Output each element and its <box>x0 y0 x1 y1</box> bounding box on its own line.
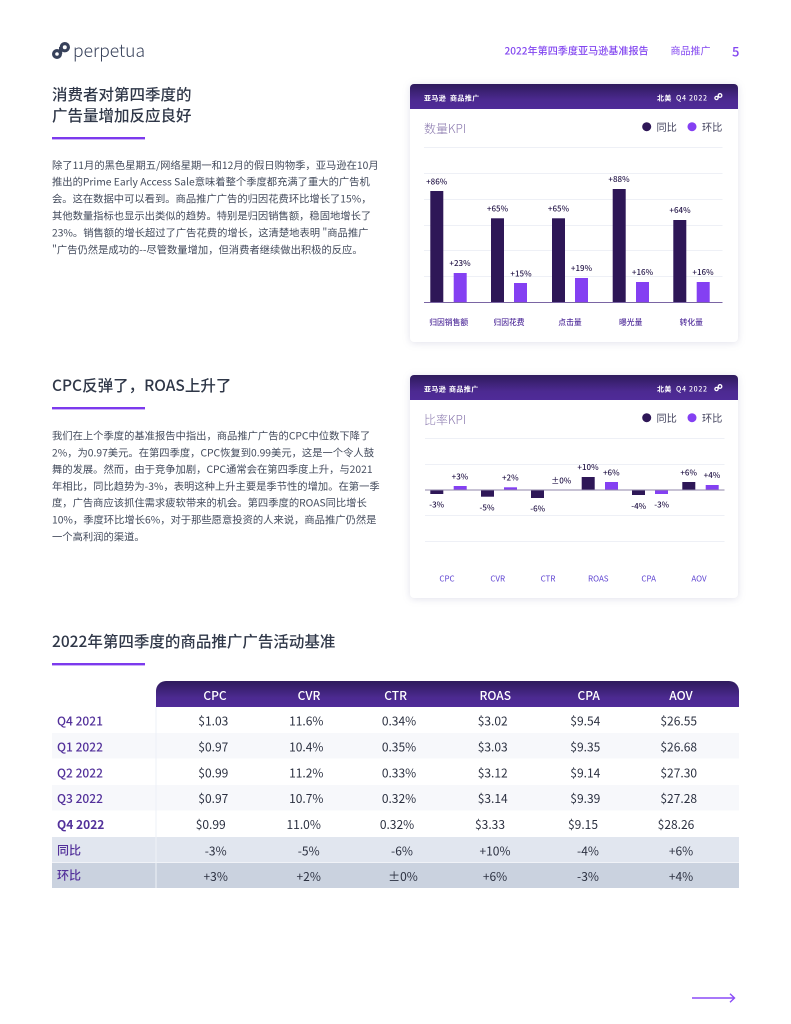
table header row: AOV <box>669 687 694 704</box>
bar chart: volume KPIs: 点击量 <box>558 317 582 328</box>
legend: 同比 <box>656 119 677 134</box>
panel header bar: 商品推广 <box>449 384 479 394</box>
row: Q2 2022: 11.2% <box>289 764 323 781</box>
section 1 body text <box>52 157 379 256</box>
table header row: CTR <box>384 687 407 704</box>
section 3 heading: 2022年第四季度的商品推广广告活动基准 <box>52 630 335 652</box>
section 2 heading: CPC反弹了，ROAS上升了 <box>52 374 231 396</box>
bar chart: ratio KPIs: ±0% <box>551 476 572 486</box>
section 2 body text: 年相比，同比趋势为-3%，表明这种上升主要是季节性的增加。在第一季 <box>52 478 380 493</box>
table header row <box>156 681 739 707</box>
panel header bar: Q4 2022 <box>676 384 708 394</box>
panel header bar: 北美 <box>657 384 672 394</box>
chart title: 数量KPI <box>424 120 466 137</box>
row: year over year: +10% <box>479 842 511 860</box>
legend: 同比 <box>656 410 677 425</box>
section 1 body text: "广告仍然是成功的--尽管数量增加，但消费者继续做出积极的反应。 <box>52 241 363 256</box>
table header row: ROAS <box>480 687 511 704</box>
row: Q4 2022: $0.99 <box>196 816 226 833</box>
bar chart: ratio KPIs: +6% <box>680 468 697 478</box>
row: Q2 2022: $3.12 <box>478 764 508 781</box>
bar chart: ratio KPIs: ROAS <box>588 574 609 584</box>
row: quarter over quarter <box>52 863 739 888</box>
legend: 环比 <box>702 410 722 425</box>
row: quarter over quarter: ±0% <box>388 868 418 885</box>
row: Q4 2022 <box>52 811 739 836</box>
row: year over year: -3% <box>205 842 227 860</box>
bar chart: volume KPIs: +19% <box>571 263 593 274</box>
section 2 body text: 度，广告商应该抓住需求疲软带来的机会。第四季度的ROAS同比增长 <box>52 495 367 510</box>
section 1 heading <box>52 83 192 139</box>
bar chart: volume KPIs: +65% <box>487 204 509 214</box>
bar chart: volume KPIs: +15% <box>510 268 532 280</box>
row: quarter over quarter: 环比 <box>57 866 81 884</box>
row: Q1 2022: $26.68 <box>660 738 697 756</box>
table header row: CVR <box>298 687 320 704</box>
bar chart: ratio KPIs: -5% <box>480 502 495 514</box>
legend <box>642 410 722 425</box>
row: Q2 2022: $0.99 <box>198 764 228 781</box>
row: year over year: 同比 <box>57 842 81 858</box>
panel header bar: 亚马逊 <box>424 384 446 394</box>
row: Q3 2022 <box>52 785 739 810</box>
row: Q4 2021: $3.02 <box>478 712 508 730</box>
row: Q3 2022: $27.28 <box>660 790 697 807</box>
section 2 body text: 2%，为0.97美元。在第四季度，CPC恢复到0.99美元，这是一个令人鼓 <box>52 444 374 459</box>
bar chart: volume KPIs: +64% <box>669 205 691 216</box>
report header: title, section, page number: 2022年第四季度亚马逊基准报告 <box>504 42 649 58</box>
bar chart: ratio KPIs: CVR <box>490 574 505 584</box>
report header: title, section, page number: 商品推广 <box>670 42 710 58</box>
bar chart: ratio KPIs: CPA <box>641 574 656 584</box>
bar chart: ratio KPIs: -3% <box>654 500 670 510</box>
row: year over year: -5% <box>298 842 320 860</box>
row: Q4 2022: Q4 2022 <box>57 816 104 833</box>
row: Q1 2022: $3.03 <box>478 738 508 756</box>
section 1 body text: 23%。销售额的增长超过了广告花费的增长，这清楚地表明 "商品推广 <box>52 224 368 239</box>
section 2 body text: 10%，季度环比增长6%，对于那些愿意投资的人来说，商品推广仍然是 <box>52 512 376 526</box>
bar chart: ratio KPIs: +3% <box>452 472 469 482</box>
row: Q1 2022: 0.35% <box>382 738 416 756</box>
icon: next page arrow <box>692 994 734 1002</box>
bar chart: ratio KPIs: +2% <box>502 472 519 484</box>
table header row: CPA <box>578 687 600 704</box>
section 1 body text: 会。这在数据中可以看到。商品推广广告的归因花费环比增长了15%， <box>52 191 372 206</box>
report header: title, section, page number: 5 <box>732 42 739 60</box>
row: Q4 2022: $9.15 <box>568 816 598 833</box>
row: quarter over quarter: +3% <box>204 868 228 885</box>
chart title: 比率KPI <box>424 411 466 428</box>
row: Q1 2022: $9.35 <box>570 738 601 756</box>
panel header bar: 商品推广 <box>450 94 480 104</box>
section 1 body text: 其他数量指标也显示出类似的趋势。特别是归因销售额，稳固地增长了 <box>52 208 371 222</box>
row: Q4 2021: 11.6% <box>289 712 323 730</box>
panel: volume KPI chart <box>410 84 738 342</box>
legend <box>642 119 722 134</box>
row: Q2 2022: $27.30 <box>660 764 697 781</box>
row: quarter over quarter: -3% <box>577 868 599 885</box>
logo: perpetua: perpetua <box>73 37 145 63</box>
bar chart: volume KPIs: +23% <box>449 258 471 269</box>
row: Q1 2022 <box>52 733 739 758</box>
row: Q1 2022: 10.4% <box>289 738 323 756</box>
row: Q4 2021: 0.34% <box>382 712 416 730</box>
row: Q3 2022: Q3 2022 <box>57 790 103 807</box>
bar chart: ratio KPIs: -6% <box>530 504 546 514</box>
section 1 body text: 推出的Prime Early Access Sale意味着整个季度都充满了重大的广告机 <box>52 174 370 189</box>
bar chart: ratio KPIs: -4% <box>631 501 647 512</box>
bar chart: ratio KPIs: AOV <box>691 574 707 584</box>
row: Q3 2022: $0.97 <box>198 790 229 807</box>
section 2 body text: 我们在上个季度的基准报告中指出，商品推广广告的CPC中位数下降了 <box>52 428 370 442</box>
row: Q3 2022: $9.39 <box>570 790 600 807</box>
bar chart: ratio KPIs: CTR <box>541 574 555 584</box>
bar chart: ratio KPIs: CPC <box>439 574 455 584</box>
row: Q3 2022: $3.14 <box>478 790 508 807</box>
row: Q4 2021: $1.03 <box>198 712 228 730</box>
row: year over year: +6% <box>669 842 693 860</box>
bar chart: ratio KPIs <box>425 438 724 584</box>
section 2 body text: 舞的发展。然而，由于竞争加剧，CPC通常会在第四季度上升，与2021 <box>52 461 373 476</box>
row: Q4 2022: $28.26 <box>658 816 695 833</box>
row: Q4 2022: 0.32% <box>380 816 414 833</box>
section 2 body text: 一个高利润的渠道。 <box>52 528 145 543</box>
panel header bar <box>410 84 738 109</box>
row: Q4 2022: 11.0% <box>287 816 321 833</box>
row: Q2 2022: 0.33% <box>382 764 416 781</box>
row: Q3 2022: 10.7% <box>289 790 323 807</box>
report header: title, section, page number <box>504 42 739 60</box>
row: Q2 2022: Q2 2022 <box>57 764 103 781</box>
bar chart: ratio KPIs: +4% <box>704 470 721 481</box>
panel header bar: 北美 <box>657 94 672 104</box>
row: Q1 2022: $0.97 <box>198 738 229 756</box>
table header row: CPC <box>203 687 227 704</box>
row: quarter over quarter: +4% <box>669 868 693 885</box>
panel header bar <box>410 375 738 400</box>
panel header bar: 亚马逊 <box>424 94 446 104</box>
row: quarter over quarter: +6% <box>483 868 507 885</box>
bar chart: volume KPIs: +16% <box>692 267 714 278</box>
row: Q4 2021 <box>52 707 739 732</box>
panel: ratio KPI chart <box>410 375 738 598</box>
bar chart: volume KPIs: 归因销售额 <box>429 317 468 328</box>
row: Q3 2022: 0.32% <box>382 790 416 807</box>
row: Q2 2022 <box>52 759 739 784</box>
row: Q2 2022: $9.14 <box>570 764 601 781</box>
row: year over year: -4% <box>577 842 599 860</box>
section 2 body text <box>52 428 380 543</box>
row: Q4 2021: Q4 2021 <box>57 712 103 730</box>
legend: 环比 <box>702 119 722 134</box>
bar chart: ratio KPIs: +6% <box>603 468 620 478</box>
row: Q4 2021: $9.54 <box>570 712 601 730</box>
bar chart: ratio KPIs: +10% <box>577 462 599 473</box>
row: Q1 2022: Q1 2022 <box>57 738 103 756</box>
bar chart: volume KPIs: +16% <box>632 267 654 278</box>
panel header bar: Q4 2022 <box>676 94 708 104</box>
row: quarter over quarter: +2% <box>297 868 321 885</box>
bar chart: ratio KPIs: -3% <box>429 500 445 510</box>
row: year over year <box>52 837 739 862</box>
bar chart: volume KPIs <box>424 148 722 328</box>
bar chart: volume KPIs: 归因花费 <box>493 317 525 328</box>
section 1 body text: 除了11月的黑色星期五/网络星期一和12月的假日购物季，亚马逊在10月 <box>52 157 379 172</box>
section 1 heading: 消费者对第四季度的 <box>52 83 192 105</box>
bar chart: volume KPIs: +86% <box>426 176 448 188</box>
row: Q4 2022: $3.33 <box>475 816 505 833</box>
row: year over year: -6% <box>391 842 413 860</box>
row: Q4 2021: $26.55 <box>660 712 697 730</box>
bar chart: volume KPIs: +65% <box>548 204 570 214</box>
benchmark table <box>52 681 739 888</box>
bar chart: volume KPIs: 曝光量 <box>619 317 643 328</box>
bar chart: volume KPIs: +88% <box>608 174 630 185</box>
bar chart: volume KPIs: 转化量 <box>680 317 703 328</box>
section 1 heading: 广告量增加反应良好 <box>52 104 192 126</box>
